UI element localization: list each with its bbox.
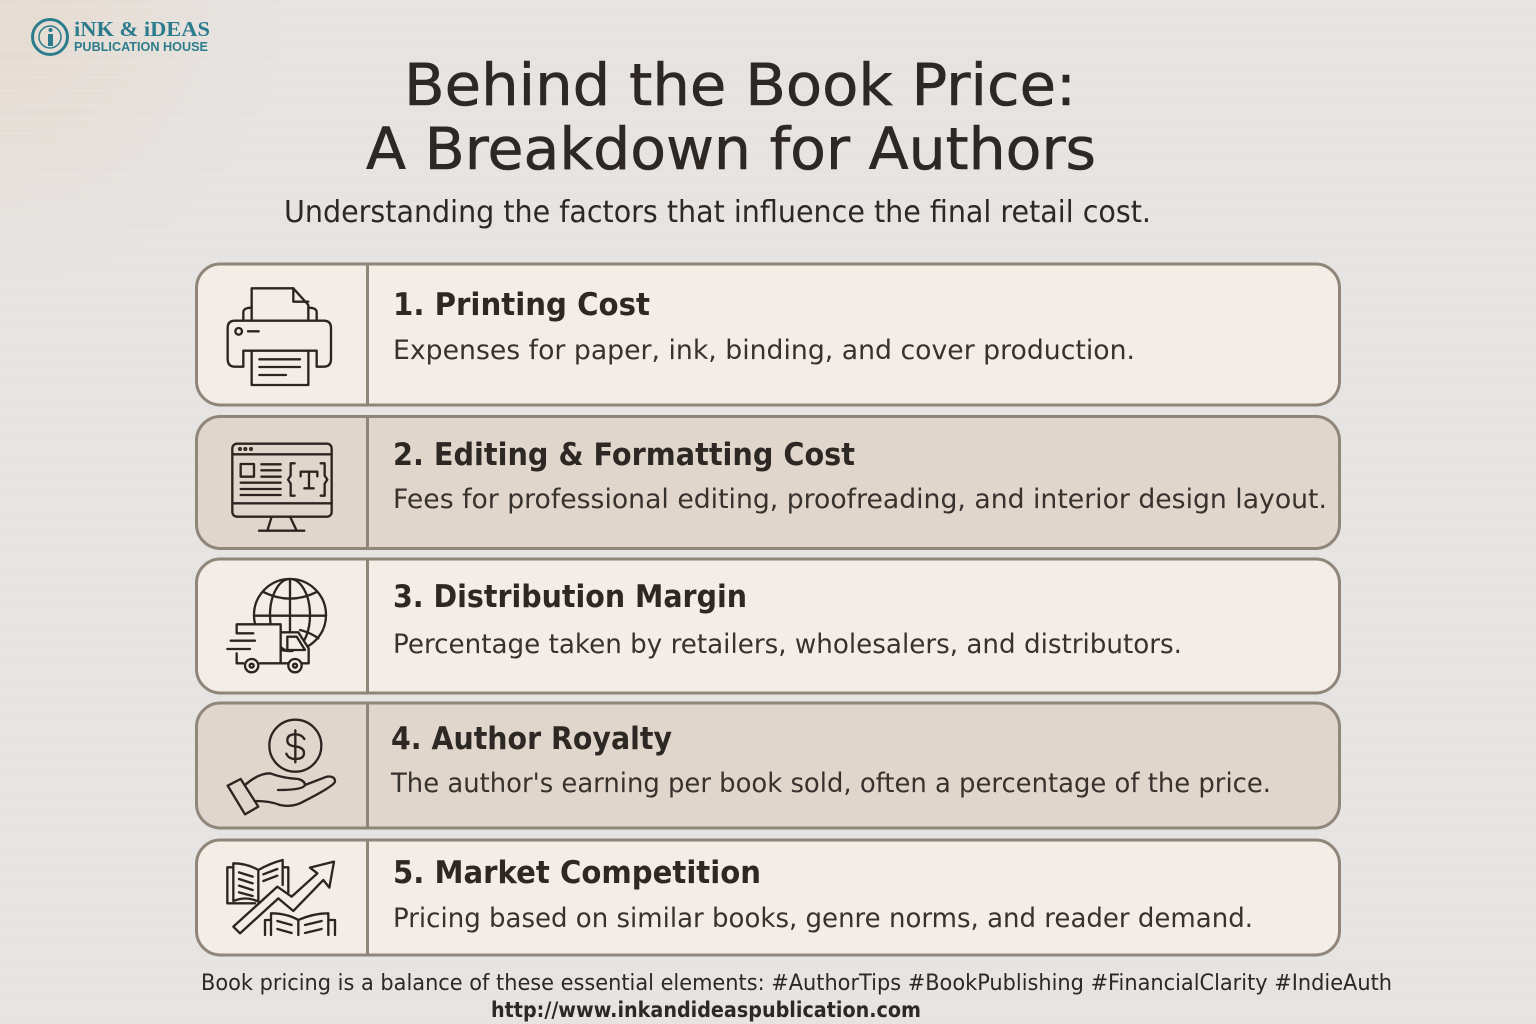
logo: Ink & Ideas Publication House: PUBLICATION HOUSE [74, 39, 208, 54]
icon: open books and rising arrow [227, 860, 335, 935]
website url: http://www.inkandideaspublication.com [491, 998, 921, 1022]
description: editing and formatting: Fees for professional editing, proofreading, and interior design layout. [393, 484, 1327, 515]
heading: market competition: 5. Market Competition [393, 855, 761, 891]
logo: Ink & Ideas Publication House [32, 17, 210, 54]
panel: printing cost [196, 264, 1340, 405]
panel: editing and formatting cost [196, 416, 1340, 548]
panel: market competition [196, 840, 1340, 955]
heading: editing and formatting: 2. Editing & Formatting Cost [393, 437, 855, 473]
panel: distribution margin [196, 559, 1340, 693]
icon: monitor with layout [232, 444, 332, 531]
title: Behind the Book Price: [404, 51, 1076, 119]
heading: printing cost: 1. Printing Cost [393, 287, 650, 323]
subtitle: Understanding the factors that influence the final retail cost. [284, 195, 1151, 230]
heading: distribution margin: 3. Distribution Margin [393, 579, 747, 615]
description: market competition: Pricing based on similar books, genre norms, and reader demand. [393, 903, 1253, 934]
title [366, 51, 1096, 183]
description: author royalty: The author's earning per book sold, often a percentage of the price. [390, 768, 1271, 799]
title: A Breakdown for Authors [366, 115, 1096, 183]
icon: globe and delivery truck [227, 579, 326, 672]
icon: hand holding coin [228, 720, 335, 814]
heading: author royalty: 4. Author Royalty [391, 721, 672, 757]
icon: printer [228, 288, 331, 385]
footer text: Book pricing is a balance of these essential elements: #AuthorTips #BookPublishing #FinancialClarity #IndieAuth [201, 971, 1392, 996]
description: distribution margin: Percentage taken by retailers, wholesalers, and distributors. [393, 629, 1182, 660]
logo: Ink & Ideas Publication House: iNK & iDEAS [74, 17, 210, 41]
panel: author royalty [196, 703, 1340, 828]
description: printing cost: Expenses for paper, ink, binding, and cover production. [393, 335, 1135, 366]
